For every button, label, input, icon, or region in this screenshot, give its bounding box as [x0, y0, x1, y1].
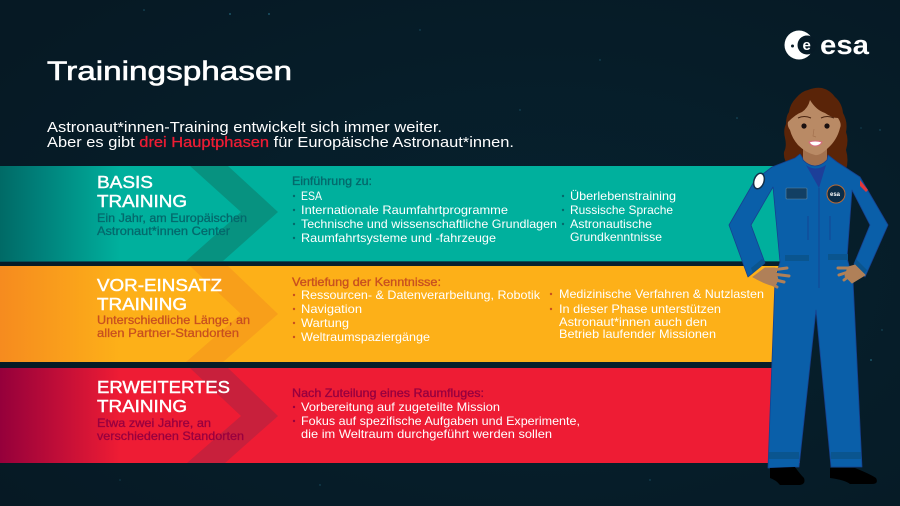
undershirt	[806, 165, 826, 188]
heading: basis	[97, 172, 187, 211]
list: basis column 2: Überlebenstraining	[570, 189, 676, 203]
subtitle: vor-einsatz: Unterschiedliche Länge, an	[97, 313, 250, 327]
suit	[729, 154, 888, 468]
face	[788, 100, 841, 155]
heading: vor-einsatz	[97, 275, 222, 314]
panel: basis training	[0, 166, 800, 262]
heading: vor-einsatz: TRAINING	[97, 294, 187, 314]
list: basis column 1: ESA	[301, 189, 322, 203]
heading: erweitertes: ERWEITERTES	[97, 377, 230, 397]
list: vor-einsatz column 1: Wartung	[301, 316, 349, 330]
illustration: astronaut	[729, 88, 888, 485]
name tag	[786, 188, 807, 199]
title: Trainingsphasen	[47, 56, 292, 86]
list: basis column 2: Grundkenntnisse	[570, 230, 662, 244]
logo: esa: e	[802, 37, 811, 54]
intro text: Astronaut*innen-Training entwickelt sich immer weiter.	[47, 120, 442, 136]
neck	[803, 146, 827, 166]
belt and cuffs	[751, 254, 867, 459]
subtitle: vor-einsatz: allen Partner-Standorten	[97, 326, 239, 340]
subtitle: erweitertes	[97, 416, 244, 443]
subtitle: vor-einsatz	[97, 313, 250, 340]
logo: esa	[784, 30, 870, 60]
eyes and mouth	[798, 116, 834, 146]
list: basis column 1: Raumfahrtsysteme und -fahrzeuge	[301, 231, 496, 245]
chevron: basis	[186, 166, 278, 261]
chevron: vor-einsatz	[186, 266, 278, 362]
list: vor-einsatz column 1: Ressourcen- & Datenverarbeitung, Robotik	[301, 288, 541, 302]
subtitle: basis: Astronaut*innen Center	[97, 224, 230, 238]
list: vor-einsatz column 1: Navigation	[301, 302, 362, 316]
list: vor-einsatz column 2	[550, 287, 764, 341]
list: erweitertes: Fokus auf spezifische Aufgaben und Experimente,	[301, 414, 580, 428]
text: erweitertes topics heading: Nach Zuteilung eines Raumfluges:	[292, 386, 484, 400]
heading: erweitertes: TRAINING	[97, 396, 187, 416]
red flag patch	[860, 180, 868, 192]
list: basis column 2	[562, 189, 676, 244]
list: erweitertes: die im Weltraum durchgeführt werden sollen	[301, 427, 552, 441]
list: basis column 1	[293, 189, 557, 245]
heading: basis: TRAINING	[97, 191, 187, 211]
esa badge: esa	[830, 192, 841, 198]
list: vor-einsatz column 2: Astronaut*innen auch den	[559, 315, 707, 329]
list: erweitertes	[293, 400, 580, 441]
chevron: erweitertes	[187, 368, 278, 463]
heading: vor-einsatz: VOR-EINSATZ	[97, 275, 222, 295]
list: basis column 1: Technische und wissenschaftliche Grundlagen	[301, 217, 557, 231]
panel: erweitertes training	[0, 368, 800, 463]
list: basis column 2: Astronautische	[570, 217, 652, 231]
esa badge	[827, 185, 845, 203]
logo: esa: esa	[820, 30, 870, 60]
hands	[753, 265, 865, 287]
text: basis topics heading: Einführung zu:	[292, 174, 372, 188]
list: basis column 2: Russische Sprache	[570, 203, 673, 217]
intro text	[47, 120, 514, 151]
list: erweitertes: Vorbereitung auf zugeteilte Mission	[301, 400, 500, 414]
subtitle: erweitertes: verschiedenen Standorten	[97, 429, 244, 443]
list: vor-einsatz column 2: Medizinische Verfahren & Nutzlasten	[559, 287, 764, 301]
zipper and seams	[808, 188, 830, 288]
list: vor-einsatz column 1: Weltraumspaziergänge	[301, 330, 430, 344]
shoes	[770, 467, 877, 485]
intro text: Aber es gibt drei Hauptphasen für Europäische Astronaut*innen.	[47, 135, 514, 151]
heading: basis: BASIS	[97, 172, 153, 192]
subtitle: erweitertes: Etwa zwei Jahre, an	[97, 416, 211, 430]
list: vor-einsatz column 1	[293, 288, 541, 344]
heading: erweitertes	[97, 377, 230, 416]
subtitle: basis: Ein Jahr, am Europäischen	[97, 211, 247, 225]
text: vor-einsatz topics heading: Vertiefung der Kenntnisse:	[292, 275, 441, 289]
hair	[784, 88, 848, 170]
list: vor-einsatz column 2: In dieser Phase unterstützen	[559, 302, 721, 316]
list: vor-einsatz column 2: Betrieb laufender Missionen	[559, 327, 716, 341]
shoulder patch	[752, 172, 766, 190]
subtitle: basis	[97, 211, 247, 238]
panel: vor-einsatz training	[0, 266, 800, 362]
list: basis column 1: Internationale Raumfahrtprogramme	[301, 203, 508, 217]
